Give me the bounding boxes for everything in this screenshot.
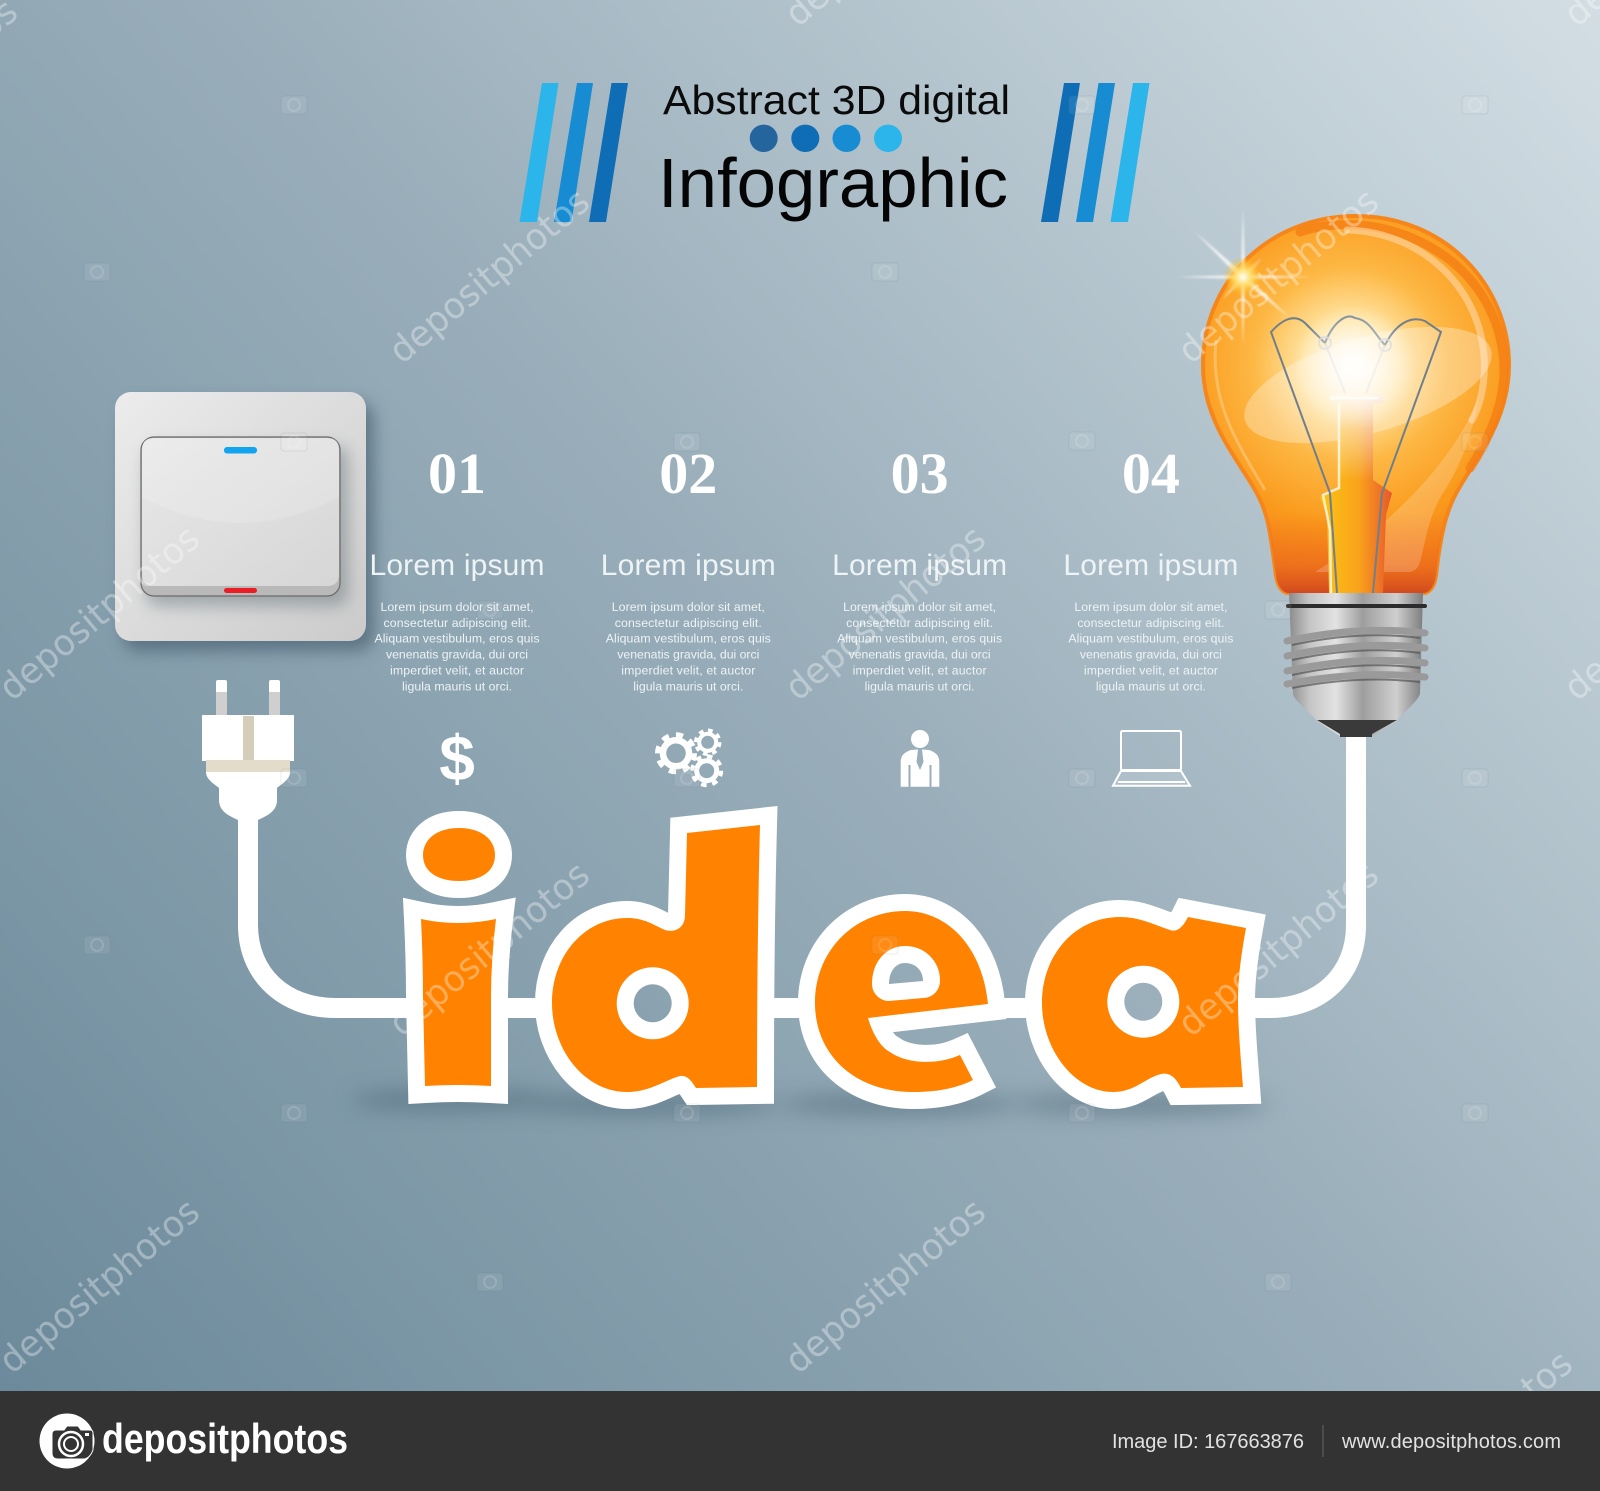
body 01 [374,600,540,693]
column 02 [601,441,776,785]
letter i dot [423,828,495,881]
blue indicator [224,447,257,454]
body 02: Lorem ipsum dolor sit amet, [612,600,765,614]
footer image id: Image ID: 167663876 [1112,1431,1304,1453]
heading 02: Lorem ipsum [601,549,776,582]
light flare [1178,208,1312,345]
body 03: Aliquam vestibulum, eros quis [837,632,1002,646]
number 03: 03 [891,441,949,506]
letter shadows [350,1090,1270,1114]
icon: gears [658,730,721,785]
title line two: Infographic [658,144,1008,222]
body 03: ligula mauris ut orci. [865,679,975,693]
body 01: Lorem ipsum dolor sit amet, [380,600,534,614]
body 04: venenatis gravida, dui orci [1080,648,1222,662]
watermarks: depositphotos [1170,181,1387,372]
screw base [1286,593,1427,737]
watermark cameras [84,96,1488,1291]
letter e [815,911,988,1092]
icon: dollar: $ [439,722,475,794]
body 02: imperdiet velit, et auctor [621,663,755,677]
heading 04: Lorem ipsum [1063,549,1238,582]
heading 03: Lorem ipsum [832,549,1007,582]
plug [202,680,294,830]
letter d [552,825,760,1092]
title block [520,77,1150,222]
watermarks: depositphotos [381,854,598,1045]
heading 01: Lorem ipsum [370,549,544,582]
red indicator [224,588,257,593]
body 02: ligula mauris ut orci. [633,679,743,693]
footer bar [0,1391,1600,1491]
footer logo icon [40,1414,94,1468]
column 01 [370,441,544,794]
body 04: imperdiet velit, et auctor [1084,663,1218,677]
icon: laptop [1113,731,1190,786]
watermarks: depositphotos [381,181,598,372]
body 04: Lorem ipsum dolor sit amet, [1074,600,1227,614]
light bulb [1178,208,1509,737]
plug prongs [216,680,280,715]
watermarks: depositphotos [1170,854,1387,1045]
body 01: venenatis gravida, dui orci [386,648,528,662]
idea lettering [421,825,1246,1092]
body 03: imperdiet velit, et auctor [853,663,987,677]
number 04: 04 [1122,441,1180,506]
filament wires [1271,317,1441,593]
bulb lower reflection [1315,400,1478,572]
watermarks: depositphotos [777,518,994,709]
bulb core glow [1293,306,1417,430]
right title stripes [1041,83,1150,222]
body 01: ligula mauris ut orci. [402,679,512,693]
watermarks: depositphotos [777,1191,994,1382]
body 03: Lorem ipsum dolor sit amet, [843,600,996,614]
body 04: ligula mauris ut orci. [1096,679,1206,693]
screw threads [1287,630,1425,684]
cord [236,730,1370,1008]
letter i [421,919,496,1086]
body 01: consectetur adipiscing elit. [384,616,530,630]
number 02: 02 [659,441,717,506]
letter a [1042,917,1246,1092]
body 03 [837,600,1002,693]
bulb highlight [1232,304,1504,466]
number 01: 01 [428,441,486,506]
title dots [750,125,902,152]
body 02: venenatis gravida, dui orci [617,648,759,662]
body 01: imperdiet velit, et auctor [390,663,524,677]
column 03 [832,441,1007,787]
icon: person [901,730,939,787]
body 02: consectetur adipiscing elit. [615,616,762,630]
column 04 [1063,441,1238,786]
footer url: www.depositphotos.com [1341,1431,1561,1453]
left title stripes [520,83,628,222]
body 01: Aliquam vestibulum, eros quis [374,632,540,646]
title line one: Abstract 3D digital [663,77,1010,123]
footer logo wordmark: depositphotos [102,1415,348,1462]
body 04: Aliquam vestibulum, eros quis [1068,632,1233,646]
body 02 [606,600,771,693]
bulb glass [1203,216,1509,593]
body 03: consectetur adipiscing elit. [846,616,993,630]
body 04: consectetur adipiscing elit. [1077,616,1224,630]
body 04 [1068,600,1233,693]
wall switch [115,392,374,651]
body 03: venenatis gravida, dui orci [849,648,991,662]
glass stem [1320,395,1392,593]
body 02: Aliquam vestibulum, eros quis [606,632,771,646]
